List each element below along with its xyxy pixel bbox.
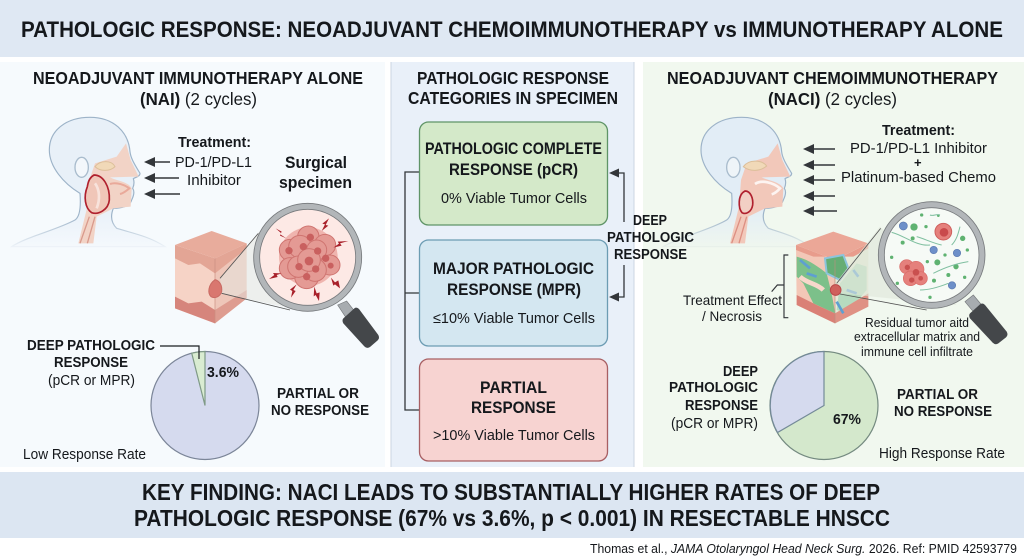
surgical specimen label — [279, 153, 352, 192]
label: deep pathologic response — [669, 364, 758, 432]
icon: head and neck with large tumor — [12, 117, 165, 247]
card: pathologic complete response: 0% Viable Tumor Cells — [441, 190, 587, 207]
label: partial or no response: PARTIAL OR — [897, 387, 978, 403]
card: major pathologic response: RESPONSE (MPR) — [447, 281, 581, 299]
icon: head and neck with small tumor — [663, 117, 810, 247]
label: deep pathologic response: (pCR or MPR) — [48, 373, 135, 389]
label: deep pathologic response: (pCR or MPR) — [671, 416, 758, 432]
heading: NACI: NEOADJUVANT CHEMOIMMUNOTHERAPY — [667, 68, 998, 88]
heading: NAI — [33, 68, 363, 109]
heading: categories — [408, 68, 618, 108]
bracket — [405, 172, 419, 410]
label: treatment effect — [683, 292, 782, 324]
label: deep pathologic response bridge: PATHOLOGIC — [607, 230, 694, 246]
key finding banner: PATHOLOGIC RESPONSE (67% vs 3.6%, p < 0.001) IN RESECTABLE HNSCC — [134, 505, 890, 531]
heading: NAI: (NAI) (2 cycles) — [140, 89, 257, 109]
label: deep pathologic response: RESPONSE — [54, 355, 128, 371]
surgical specimen label: Surgical — [285, 153, 347, 172]
label: partial or no response: NO RESPONSE — [894, 404, 992, 420]
arrows: treatment — [144, 157, 180, 199]
label: partial or no response — [894, 387, 992, 420]
citation: Thomas et al., JAMA Otolaryngol Head Neck Surg. 2026. Ref: PMID 42593779 — [590, 541, 1017, 556]
surgical specimen label: specimen — [279, 173, 352, 192]
treatment label: Inhibitor — [187, 172, 241, 189]
icon: treated tissue block and magnifier — [772, 202, 1008, 344]
heading: NACI — [667, 68, 998, 109]
card: major pathologic response: MAJOR PATHOLOGIC — [433, 260, 594, 278]
card: major pathologic response: ≤10% Viable Tumor Cells — [433, 310, 595, 327]
pie chart: NAI 3.6% — [151, 352, 259, 460]
pie chart: NACI 67% — [770, 352, 878, 460]
label: treatment effect: / Necrosis — [702, 308, 762, 324]
treatment label: Treatment: — [882, 122, 955, 139]
label: deep pathologic response bridge: RESPONSE — [614, 247, 687, 263]
arrows: deep pathologic response — [609, 168, 624, 302]
icon: tissue block and magnifier — [175, 203, 379, 348]
callout line — [160, 346, 199, 359]
label: low response rate: Low Response Rate — [23, 447, 146, 463]
label: residual tumor: immune cell infiltrate — [861, 345, 973, 359]
arrows: treatment — [803, 144, 837, 216]
label: residual tumor: Residual tumor aitd — [865, 316, 969, 330]
label: partial or no response: PARTIAL OR — [277, 386, 359, 402]
heading: NAI: NEOADJUVANT IMMUNOTHERAPY ALONE — [33, 68, 363, 88]
label: deep pathologic response bridge — [607, 213, 694, 263]
treatment label — [175, 134, 252, 189]
label: deep pathologic response bridge: DEEP — [633, 213, 667, 229]
card: pathologic complete response: PATHOLOGIC COMPLETE — [425, 140, 602, 158]
treatment label — [841, 122, 996, 186]
card: partial response — [420, 359, 608, 461]
label: deep pathologic response: DEEP PATHOLOGIC — [27, 338, 155, 354]
treatment label: PD-1/PD-L1 Inhibitor — [850, 140, 987, 157]
card: partial response: PARTIAL — [480, 379, 547, 397]
label: high response rate: High Response Rate — [879, 446, 1005, 462]
panel: neoadjuvant immunotherapy alone — [0, 62, 385, 467]
pie chart: NAI 3.6%: 3.6% — [207, 364, 239, 381]
card: partial response: >10% Viable Tumor Cells — [433, 427, 595, 444]
label: treatment effect: Treatment Effect — [683, 292, 782, 308]
panel: neoadjuvant chemoimmunotherapy — [643, 62, 1024, 467]
label: partial or no response: NO RESPONSE — [271, 403, 369, 419]
key finding banner: KEY FINDING: NACI LEADS TO SUBSTANTIALLY HIGHER RATES OF DEEP — [142, 479, 880, 505]
card: partial response: RESPONSE — [471, 399, 556, 417]
label: deep pathologic response — [27, 338, 155, 389]
heading: categories: PATHOLOGIC RESPONSE — [417, 68, 609, 88]
pie chart: NACI 67%: 67% — [833, 411, 861, 428]
treatment label: Platinum-based Chemo — [841, 169, 996, 186]
card: pathologic complete response: RESPONSE (pCR) — [449, 161, 578, 179]
label: residual tumor — [854, 316, 980, 359]
label: deep pathologic response: RESPONSE — [685, 398, 758, 414]
panel: response categories — [391, 62, 634, 467]
label: partial or no response — [271, 386, 369, 419]
title banner — [0, 0, 1024, 57]
treatment label: + — [914, 155, 922, 170]
treatment label: PD-1/PD-L1 — [175, 154, 252, 171]
label: deep pathologic response: DEEP — [723, 364, 758, 380]
heading: NACI: (NACI) (2 cycles) — [768, 89, 897, 109]
key finding banner — [0, 472, 1024, 538]
treatment label: Treatment: — [178, 134, 251, 151]
card: pathologic complete response — [420, 122, 608, 225]
label: residual tumor: extracellular matrix and — [854, 330, 980, 344]
heading: categories: CATEGORIES IN SPECIMEN — [408, 88, 618, 108]
label: deep pathologic response: PATHOLOGIC — [669, 380, 758, 396]
card: major pathologic response — [420, 240, 608, 346]
